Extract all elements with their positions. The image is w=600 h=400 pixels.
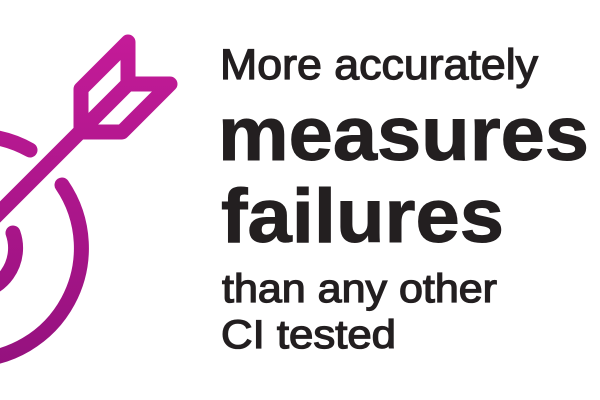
headline line 2: failures: [221, 174, 504, 259]
arrow: [0, 42, 170, 222]
target inner ring: [0, 233, 16, 293]
icon: target with arrow: [0, 42, 170, 360]
closing line 1: than any other: [222, 267, 497, 311]
closing line 2: CI tested: [221, 313, 396, 357]
target outer ring: [0, 185, 81, 360]
headline line 1: measures: [218, 92, 589, 177]
lead line: More accurately: [220, 41, 539, 89]
text block: [218, 41, 589, 357]
target outer ring upper arc: [0, 136, 30, 150]
